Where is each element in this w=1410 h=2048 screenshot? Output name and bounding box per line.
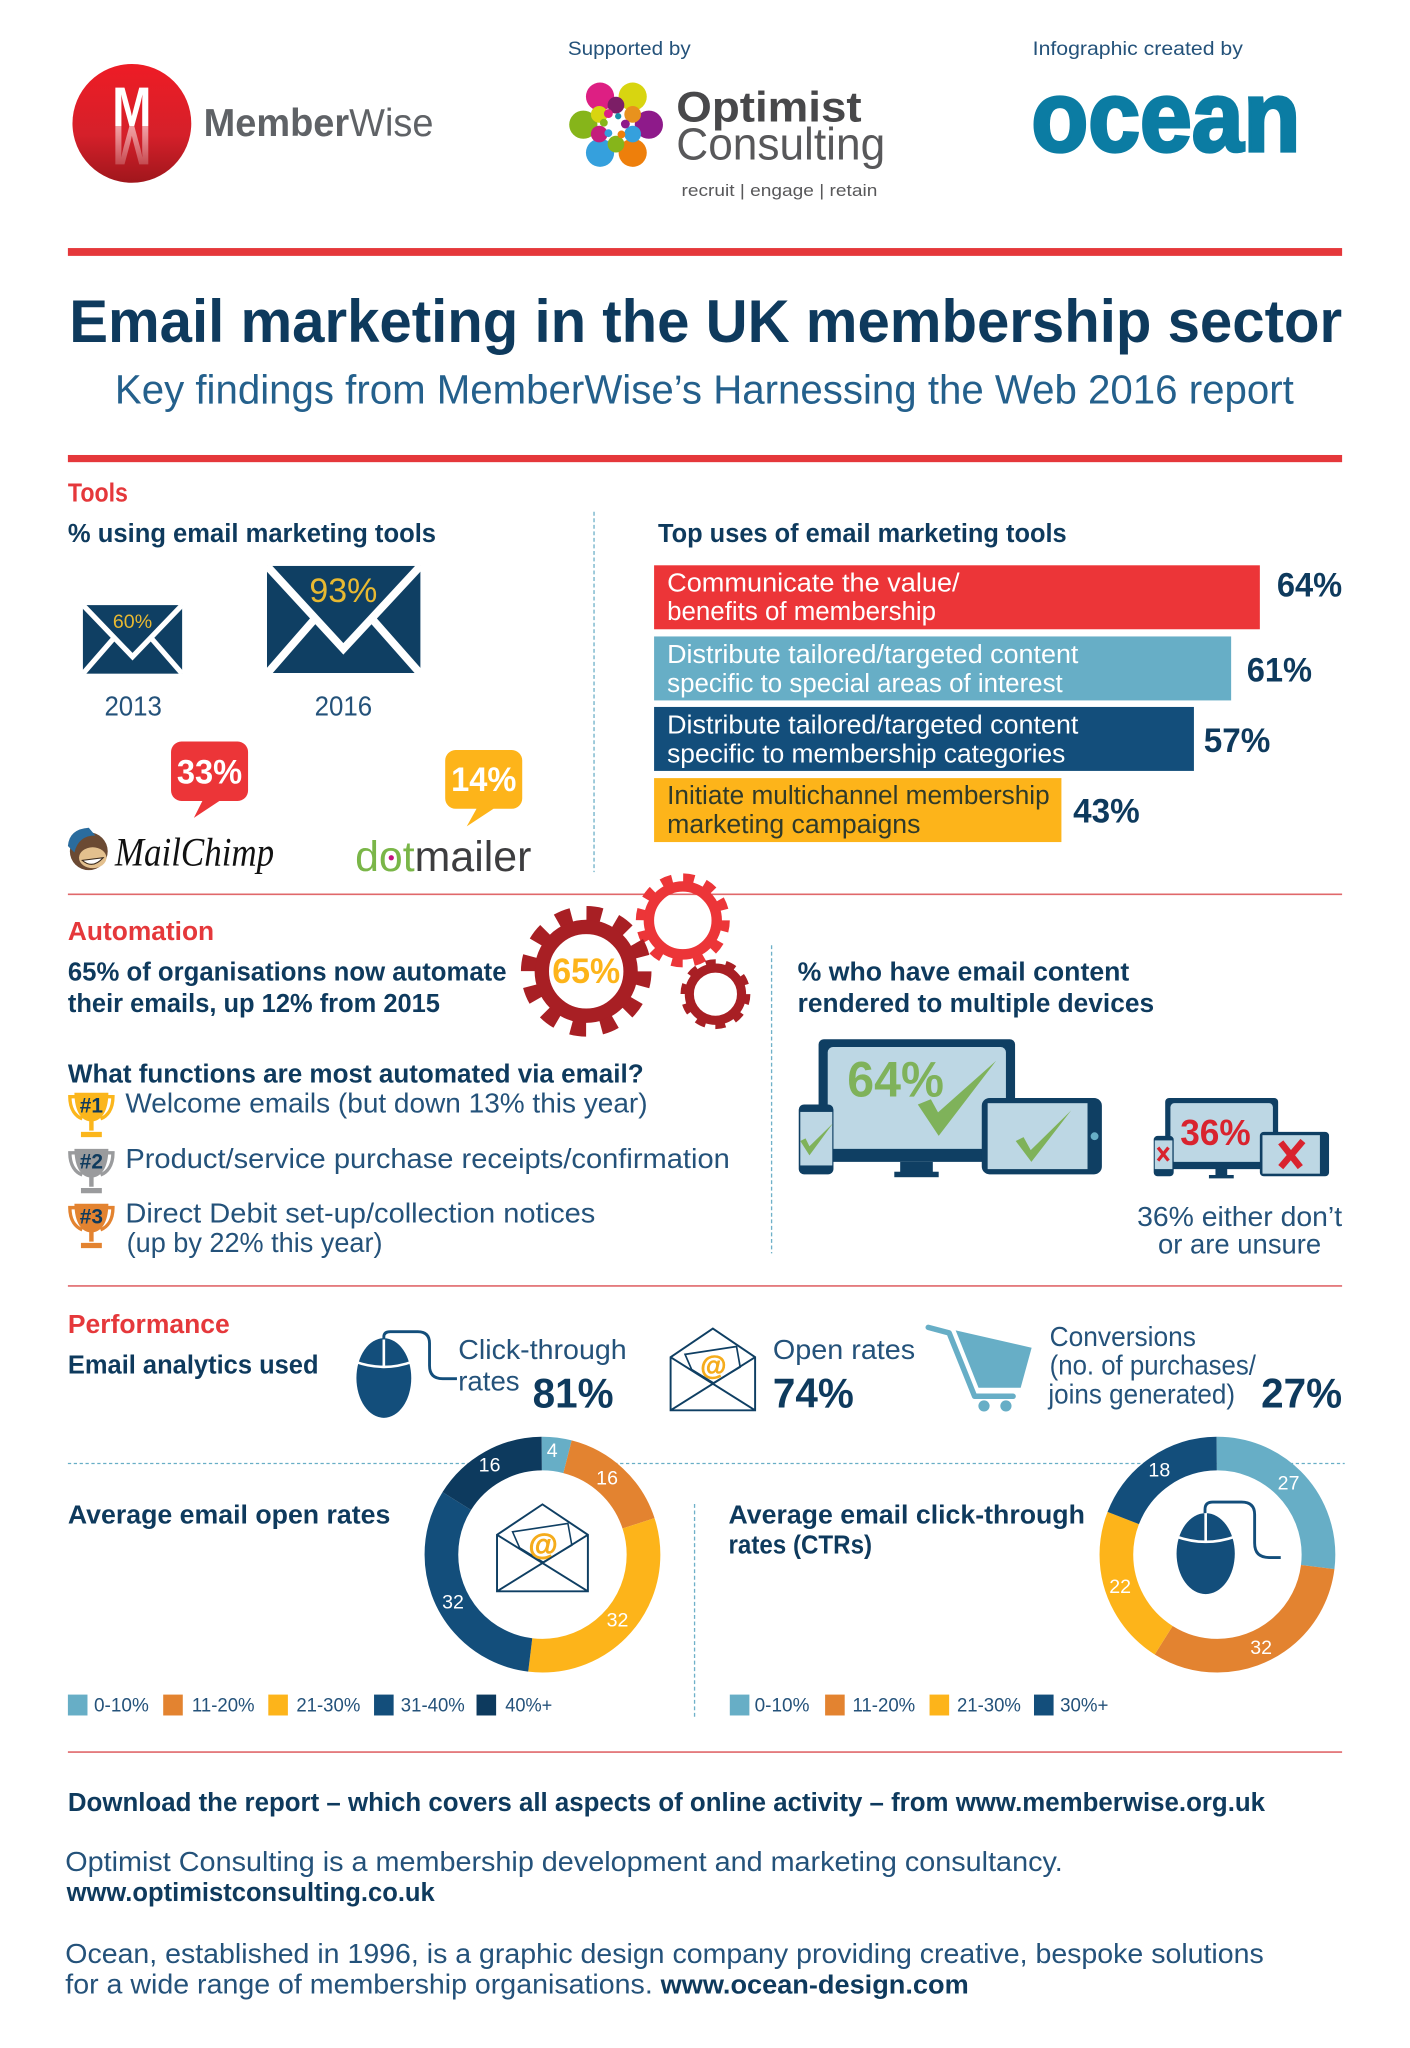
- logo: Optimist Consulting: recruit | engage | retain: [682, 181, 877, 200]
- icon: envelope in donut: @: [528, 1528, 558, 1561]
- icon: devices with crosses 36%: [1154, 1098, 1329, 1178]
- bar: 43%: Initiate multichannel membership: [667, 780, 1050, 810]
- bar: 57%: 57%: [1204, 722, 1270, 760]
- donut chart: CTRs: 22: [1109, 1576, 1131, 1598]
- donut chart: open rates: 4: [547, 1440, 558, 1462]
- caption: 36% don't: or are unsure: [1158, 1228, 1321, 1259]
- legend: open rates: [68, 1695, 552, 1717]
- label: 2016: 2016: [315, 690, 372, 721]
- item: #2 purchase receipts: #2: [80, 1150, 103, 1173]
- bar: 57%: specific to membership categories: [667, 738, 1065, 768]
- question heading: What functions are most automated via email?: [68, 1058, 644, 1088]
- heading: tools: Tools: [68, 477, 128, 507]
- sub-heading: open rates: Average email open rates: [68, 1500, 390, 1530]
- logo: MemberWise: M: [112, 114, 151, 176]
- callout: MailChimp 33%: [171, 742, 248, 818]
- logo: ocean: ocean: [1031, 61, 1300, 173]
- caption: 36% don't: [1137, 1201, 1342, 1259]
- item: #3 direct debit: #3: [80, 1205, 103, 1228]
- icon: gears with 65%: [528, 878, 747, 1029]
- item: #2 purchase receipts: [70, 1143, 730, 1193]
- statement: 65% automate: 65% of organisations now automate: [68, 956, 507, 986]
- icon: envelope in donut: [497, 1504, 588, 1591]
- icon: envelope 2013 60%: 60%: [113, 611, 152, 633]
- stat: conversions 27%: Conversions: [1050, 1321, 1196, 1352]
- stat: click-through 81%: [458, 1334, 627, 1416]
- icon: shopping cart: [928, 1327, 1032, 1412]
- text block: about Ocean: for a wide range of membership organisations.: [65, 1969, 653, 2000]
- stat: open rates 74%: [773, 1334, 915, 1416]
- sub-heading: CTRs: rates (CTRs): [728, 1530, 872, 1560]
- bar: 64%: 64%: [1277, 567, 1342, 605]
- icon: envelope 2016 93%: [267, 566, 420, 674]
- logo: MemberWise: [72, 64, 433, 183]
- bar: 43%: marketing campaigns: [667, 809, 920, 839]
- panel: multi-device rendering: [798, 956, 1342, 1259]
- item: #2 purchase receipts: Product/service purchase receipts/confirmation: [125, 1143, 730, 1174]
- panel: average open rates: [68, 1440, 644, 1717]
- legend: CTRs: [730, 1695, 1108, 1717]
- logo: MailChimp: [68, 828, 274, 875]
- text block: about Ocean: [65, 1938, 1264, 2000]
- bar: 57%: [654, 707, 1270, 771]
- text block: about Ocean: Ocean, established in 1996, is a graphic design company providing creative, bespoke solutions: [65, 1938, 1264, 1969]
- icon: devices with crosses 36%: 36%: [1180, 1112, 1251, 1153]
- stat: conversions 27%: (no. of purchases/: [1050, 1350, 1256, 1381]
- legend: CTRs: 0-10%: [755, 1695, 809, 1717]
- callout: MailChimp 33%: 33%: [177, 753, 242, 791]
- icon: gears with 65%: 65%: [552, 952, 620, 991]
- icon: envelope open rates: @: [700, 1350, 726, 1380]
- label: 2013: 2013: [104, 690, 162, 721]
- logo: Optimist Consulting: Consulting: [676, 118, 885, 169]
- icon: devices with ticks 64%: [799, 1039, 1102, 1177]
- item: #3 direct debit: Direct Debit set-up/collection notices: [125, 1198, 595, 1229]
- logo: dotmailer: dotmailer: [355, 833, 531, 881]
- legend: open rates: 31-40%: [401, 1695, 465, 1717]
- stat: click-through 81%: Click-through: [458, 1334, 627, 1365]
- logo: MemberWise: MemberWise: [204, 102, 433, 145]
- donut chart: open rates: [441, 1440, 644, 1656]
- sub-heading: rendered to devices: rendered to multiple devices: [798, 988, 1154, 1018]
- stat: conversions 27%: [1047, 1321, 1342, 1416]
- text block: about Optimist Consulting: [65, 1846, 1063, 1907]
- sub-heading: CTRs: [728, 1500, 1085, 1560]
- text block: about Ocean: www.ocean-design.com: [660, 1970, 969, 2000]
- panel: automation: [68, 878, 747, 1258]
- bar: 43%: 43%: [1073, 792, 1140, 830]
- stat: open rates 74%: 74%: [773, 1369, 854, 1416]
- logo: Optimist Consulting: Optimist: [676, 83, 862, 131]
- donut chart: open rates: 16: [596, 1467, 618, 1489]
- legend: open rates: 11-20%: [192, 1695, 255, 1717]
- bar: 61%: specific to special areas of interest: [667, 668, 1063, 698]
- text block: download call to action: Download the report – which covers all aspects of online activity – from www.memberwise.org.uk: [68, 1787, 1266, 1817]
- logo: MailChimp: MailChimp: [114, 830, 274, 875]
- text block: about Optimist Consulting: Optimist Consulting is a membership development and marketing consultancy.: [65, 1846, 1063, 1877]
- caption: 36% don't: 36% either don’t: [1137, 1201, 1342, 1232]
- subtitle: Key findings from MemberWise’s Harnessing the Web 2016 report: [115, 366, 1294, 412]
- item: #3 direct debit: (up by 22% this year): [127, 1227, 383, 1258]
- bar: 61%: 61%: [1247, 651, 1312, 689]
- bar: 61%: [654, 636, 1312, 700]
- item: #1 welcome emails: [70, 1087, 648, 1137]
- donut chart: open rates: 16: [479, 1454, 501, 1476]
- item: #1 welcome emails: #1: [80, 1094, 103, 1117]
- donut chart: open rates: 32: [442, 1591, 464, 1613]
- item: #1 welcome emails: Welcome emails (but down 13% this year): [125, 1087, 648, 1118]
- donut chart: CTRs: 27: [1278, 1473, 1299, 1495]
- statement: 65% automate: their emails, up 12% from 2015: [68, 988, 440, 1018]
- stat: conversions 27%: joins generated): [1047, 1378, 1235, 1409]
- sub-heading: rendered to devices: % who have email content: [798, 956, 1130, 986]
- donut chart: open rates: 32: [607, 1610, 628, 1632]
- heading: automation: Automation: [68, 916, 214, 946]
- stat: click-through 81%: 81%: [533, 1369, 614, 1416]
- bar: 61%: Distribute tailored/targeted content: [667, 639, 1079, 669]
- sub-heading: analytics: Email analytics used: [68, 1349, 319, 1379]
- bar: 57%: Distribute tailored/targeted content: [667, 710, 1079, 740]
- icon: envelope open rates: [671, 1329, 755, 1410]
- legend: CTRs: 11-20%: [853, 1695, 915, 1717]
- bar: 64%: Communicate the value/: [667, 567, 960, 597]
- icon: mouse in donut: [1176, 1502, 1281, 1594]
- text block: about Optimist Consulting: www.optimistconsulting.co.uk: [66, 1877, 435, 1907]
- logo: Optimist Consulting: [569, 83, 885, 200]
- legend: CTRs: 30%+: [1060, 1695, 1108, 1717]
- donut chart: CTRs: 18: [1148, 1460, 1170, 1482]
- logo: MemberWise: M: [112, 76, 151, 138]
- legend: open rates: 40%+: [505, 1695, 552, 1717]
- heading: performance: Performance: [68, 1309, 230, 1339]
- donut chart: CTRs: 32: [1250, 1637, 1272, 1659]
- created by label: Infographic created by: [1033, 38, 1243, 60]
- bar: 64%: benefits of membership: [667, 596, 936, 626]
- callout: dotmailer 14%: 14%: [451, 761, 516, 799]
- stat: conversions 27%: 27%: [1261, 1369, 1342, 1416]
- panel: performance: [68, 1309, 1342, 1418]
- supported by label: Supported by: [568, 38, 691, 60]
- sub-heading: % using tools: % using email marketing tools: [68, 518, 436, 548]
- panel: tools: [68, 477, 531, 881]
- sub-heading: top uses: Top uses of email marketing tools: [658, 518, 1067, 548]
- sub-heading: CTRs: Average email click-through: [728, 1500, 1085, 1530]
- statement: 65% automate: [68, 956, 507, 1018]
- sub-heading: rendered to devices: [798, 956, 1154, 1018]
- icon: envelope 2016 93%: 93%: [309, 572, 377, 610]
- panel: top uses bar chart: [654, 518, 1342, 842]
- bar: 43%: [654, 778, 1140, 842]
- legend: CTRs: 21-30%: [957, 1695, 1021, 1717]
- item: #3 direct debit: [70, 1198, 595, 1258]
- icon: devices with ticks 64%: 64%: [847, 1052, 944, 1108]
- icon: envelope 2013 60%: [83, 605, 182, 674]
- panel: average click-through rates: [728, 1454, 1318, 1717]
- bar: 64%: [654, 565, 1342, 629]
- title: Email marketing in the UK membership sector: [69, 288, 1342, 355]
- donut chart: CTRs: [1109, 1454, 1318, 1659]
- icon: mouse: [355, 1332, 457, 1418]
- legend: open rates: 0-10%: [94, 1695, 149, 1717]
- legend: open rates: 21-30%: [296, 1695, 360, 1717]
- callout: dotmailer 14%: [445, 750, 522, 826]
- stat: open rates 74%: Open rates: [773, 1334, 915, 1365]
- stat: click-through 81%: rates: [458, 1365, 520, 1396]
